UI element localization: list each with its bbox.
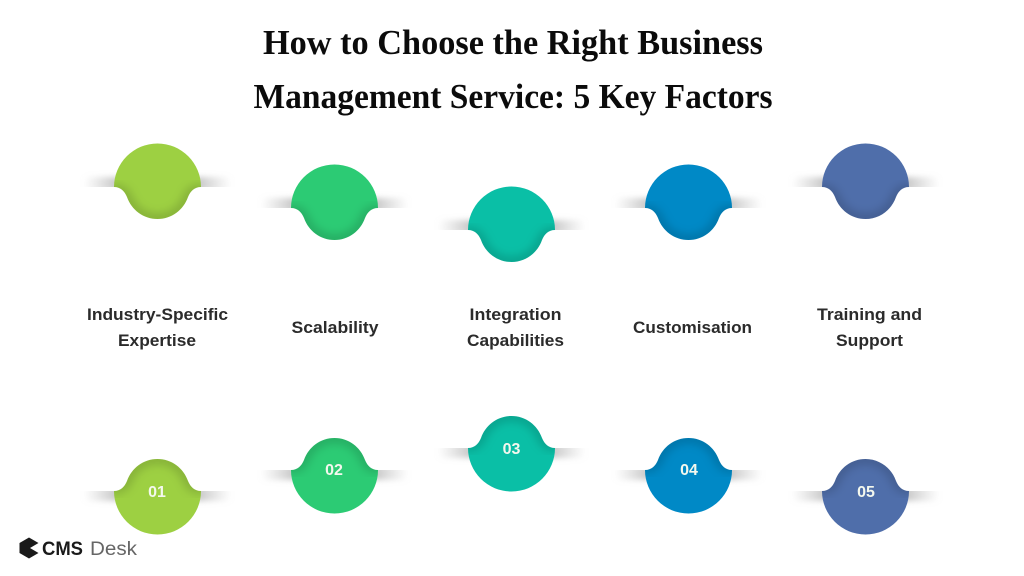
logo: CMS Desk: CMS <box>42 539 83 560</box>
label: Integration Capabilities <box>467 305 564 350</box>
title: Management Service: 5 Key Factors <box>254 77 772 116</box>
label: Integration Capabilities: Integration <box>470 305 562 324</box>
bottom badge 03 <box>438 416 586 492</box>
logo: CMS Desk <box>20 538 138 560</box>
label: Training and Support: Training and <box>817 305 922 324</box>
title: How to Choose the Right Business <box>263 23 763 62</box>
label: Integration Capabilities: Capabilities <box>467 331 564 350</box>
bottom badge 02: 02 <box>325 462 343 479</box>
label: Scalability: Scalability <box>292 318 379 337</box>
top icon 2 <box>260 164 408 240</box>
bottom badge 01 <box>84 459 232 534</box>
top icon 4 <box>614 164 762 240</box>
top icon 5 <box>792 144 940 219</box>
bottom badge 01: 01 <box>148 484 166 501</box>
title <box>254 23 772 116</box>
bottom badge 04: 04 <box>680 462 698 479</box>
top icon 3 <box>438 186 586 262</box>
bottom badge 05 <box>792 459 940 534</box>
label: Industry-Specific Expertise: Industry-Specific <box>87 305 228 324</box>
label: Training and Support <box>817 305 922 350</box>
label: Industry-Specific Expertise: Expertise <box>118 331 196 350</box>
label: Customisation: Customisation <box>633 318 752 337</box>
bottom badge 02 <box>260 438 408 514</box>
icon: logo mark <box>20 538 38 558</box>
logo: CMS Desk: Desk <box>90 539 138 560</box>
bottom badge 04 <box>614 438 762 514</box>
label: Training and Support: Support <box>836 331 903 350</box>
top icon 1 <box>84 144 232 219</box>
bottom badge 05: 05 <box>857 484 875 501</box>
bottom badge 03: 03 <box>503 441 520 458</box>
label: Industry-Specific Expertise <box>87 305 228 350</box>
